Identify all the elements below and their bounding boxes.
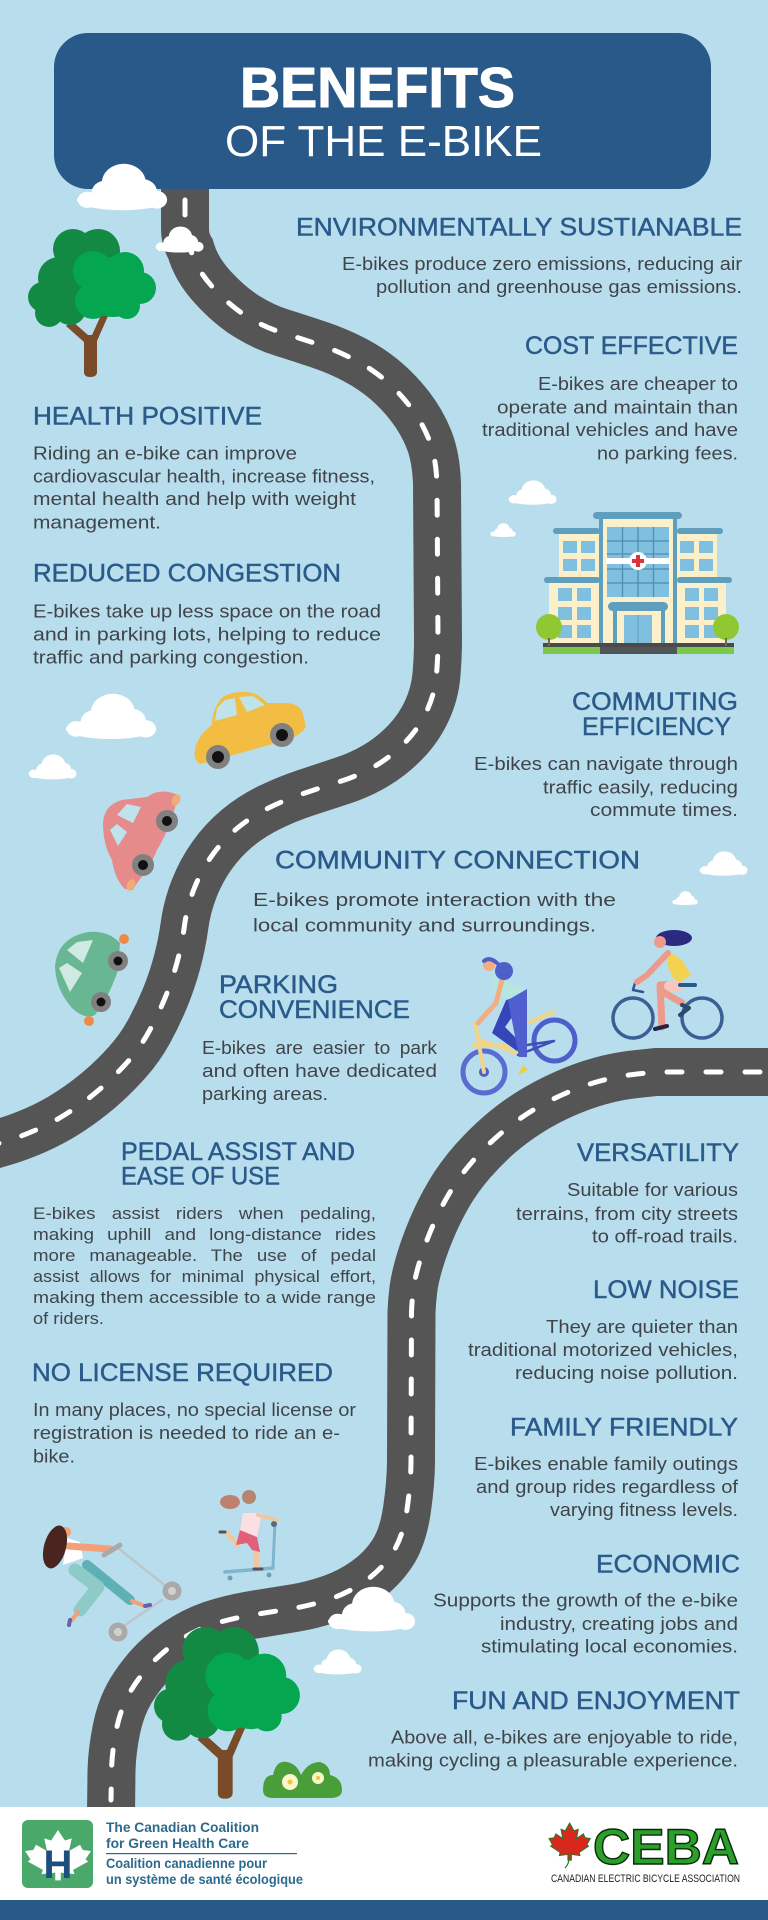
text block: parking convenience: and often have dedicated bbox=[202, 1061, 437, 1081]
logo text: Canadian Coalition for Green Health Care: Coalition canadienne pour bbox=[106, 1856, 268, 1871]
logo: CEBA: CEBA bbox=[593, 1819, 739, 1875]
text block: economic: Supports the growth of the e-bike bbox=[433, 1590, 738, 1610]
cloud: left of yellow car bbox=[66, 694, 156, 739]
icon: yellow car bbox=[195, 692, 306, 769]
text block: pedal assist: of riders. bbox=[33, 1309, 104, 1328]
text block: family friendly: and group rides regardless of bbox=[476, 1477, 739, 1497]
text block: reduced congestion: traffic and parking congestion. bbox=[33, 648, 309, 668]
text block: family friendly: E-bikes enable family outings bbox=[474, 1454, 738, 1474]
cloud: road top bbox=[155, 226, 204, 253]
text block: cost effective: E-bikes are cheaper to bbox=[538, 374, 738, 394]
text block: versatility bbox=[516, 1139, 739, 1246]
text block: environmentally sustainable: pollution and greenhouse gas emissions. bbox=[376, 277, 742, 297]
text block: cost effective bbox=[482, 332, 738, 464]
text block: pedal assist: more manageable. The use of pedal bbox=[33, 1246, 376, 1265]
icon: green car bbox=[55, 932, 129, 1026]
text block: no license required: registration is needed to ride an e- bbox=[33, 1423, 340, 1443]
text block: health positive: management. bbox=[33, 512, 161, 532]
cloud: small left bbox=[28, 754, 77, 779]
text block: pedal assist: PEDAL ASSIST AND bbox=[121, 1138, 355, 1166]
text block: no license required bbox=[32, 1359, 356, 1466]
text block: community connection: COMMUNITY CONNECTION bbox=[275, 846, 640, 874]
road: upper winding road bbox=[0, 180, 438, 1152]
text block: environmentally sustainable bbox=[296, 214, 742, 297]
text block: cost effective: no parking fees. bbox=[597, 444, 738, 464]
text block: family friendly: FAMILY FRIENDLY bbox=[510, 1414, 738, 1442]
footer bar bbox=[0, 1900, 768, 1920]
text block: commuting efficiency bbox=[474, 688, 738, 820]
tree: lower bbox=[154, 1627, 300, 1799]
logo text: Canadian Coalition for Green Health Care: for Green Health Care bbox=[106, 1836, 249, 1851]
text block: pedal assist: making them accessible to a wide range bbox=[33, 1288, 376, 1307]
text block: community connection: E-bikes promote interaction with the bbox=[253, 890, 616, 910]
text block: fun and enjoyment: FUN AND ENJOYMENT bbox=[452, 1687, 740, 1715]
text block: fun and enjoyment: making cycling a pleasurable experience. bbox=[368, 1750, 738, 1770]
text block: commuting efficiency: E-bikes can navigate through bbox=[474, 754, 738, 774]
tree: top left bbox=[28, 229, 156, 377]
text block: low noise: reducing noise pollution. bbox=[515, 1363, 738, 1383]
text block: environmentally sustainable: ENVIRONMENTALLY SUSTIANABLE bbox=[296, 214, 742, 242]
cloud: near lower road bbox=[328, 1587, 415, 1631]
text block: community connection: local community and surroundings. bbox=[253, 916, 596, 936]
text block: economic bbox=[433, 1550, 740, 1657]
icon: cyclist in yellow bbox=[613, 930, 722, 1038]
logo text: Canadian Coalition for Green Health Care: The Canadian Coalition bbox=[106, 1820, 259, 1835]
title: Benefits: BENEFITS bbox=[240, 56, 515, 120]
cloud: small lower bbox=[313, 1649, 362, 1674]
text block: health positive: mental health and help with weight bbox=[33, 489, 356, 509]
text block: reduced congestion: REDUCED CONGESTION bbox=[33, 560, 341, 588]
text block: pedal assist bbox=[33, 1138, 376, 1328]
text block: parking convenience: parking areas. bbox=[202, 1084, 328, 1104]
text block: pedal assist: making uphill and long-distance rides bbox=[33, 1225, 376, 1244]
cloud: right bbox=[699, 851, 748, 876]
text block: reduced congestion: and in parking lots, helping to reduce bbox=[33, 624, 381, 644]
text block: cost effective: traditional vehicles and have bbox=[482, 420, 738, 440]
text block: health positive: cardiovascular health, increase fitness, bbox=[33, 466, 375, 486]
text block: versatility: to off-road trails. bbox=[592, 1226, 738, 1246]
text block: no license required: bike. bbox=[33, 1446, 75, 1466]
text block: commuting efficiency: traffic easily, reducing bbox=[543, 778, 738, 798]
text block: no license required: In many places, no special license or bbox=[33, 1400, 356, 1420]
text block: pedal assist: assist allows for minimal physical effort, bbox=[33, 1267, 376, 1286]
text block: low noise: They are quieter than bbox=[546, 1317, 738, 1337]
text block: economic: ECONOMIC bbox=[596, 1550, 740, 1578]
icon: pink car bbox=[103, 791, 182, 892]
text block: pedal assist: EASE OF USE bbox=[121, 1162, 280, 1190]
text block: no license required: NO LICENSE REQUIRED bbox=[32, 1359, 333, 1387]
cloud: hospital small bbox=[490, 523, 516, 537]
text block: environmentally sustainable: E-bikes produce zero emissions, reducing air bbox=[342, 254, 742, 274]
text block: family friendly: varying fitness levels. bbox=[550, 1500, 738, 1520]
icon: cyclist in blue bbox=[463, 959, 575, 1093]
text block: low noise: LOW NOISE bbox=[593, 1276, 739, 1304]
logo text: Canadian Coalition for Green Health Care bbox=[106, 1820, 303, 1887]
text block: commuting efficiency: EFFICIENCY bbox=[582, 713, 731, 741]
text block: family friendly bbox=[474, 1414, 739, 1520]
text block: fun and enjoyment: Above all, e-bikes are enjoyable to ride, bbox=[391, 1728, 738, 1748]
text block: economic: industry, creating jobs and bbox=[500, 1614, 738, 1634]
text block: commuting efficiency: commute times. bbox=[590, 800, 738, 820]
text block: fun and enjoyment bbox=[368, 1687, 740, 1770]
text block: versatility: terrains, from city streets bbox=[516, 1204, 738, 1224]
icon: hospital bbox=[536, 512, 739, 654]
subtitle: of the e-bike: OF THE E-BIKE bbox=[225, 117, 542, 166]
text block: parking convenience: E-bikes are easier to park bbox=[202, 1038, 438, 1058]
icon: girl on scooter bbox=[220, 1490, 277, 1580]
text block: parking convenience: CONVENIENCE bbox=[219, 996, 410, 1024]
text block: pedal assist: E-bikes assist riders when pedaling, bbox=[33, 1204, 376, 1223]
cloud: title bbox=[77, 164, 167, 210]
text block: low noise: traditional motorized vehicles, bbox=[468, 1340, 738, 1360]
text block: cost effective: operate and maintain than bbox=[497, 398, 738, 418]
text block: community connection bbox=[253, 846, 640, 936]
title banner bbox=[54, 33, 711, 189]
text block: health positive bbox=[33, 402, 375, 532]
cloud: hospital large bbox=[508, 480, 557, 505]
text block: commuting efficiency: COMMUTING bbox=[572, 688, 738, 716]
logo: green health care badge bbox=[22, 1820, 93, 1888]
logo: CEBA bbox=[549, 1819, 740, 1885]
text block: health positive: Riding an e-bike can improve bbox=[33, 444, 297, 464]
text block: reduced congestion bbox=[33, 560, 381, 668]
text block: versatility: Suitable for various bbox=[567, 1180, 738, 1200]
text block: versatility: VERSATILITY bbox=[577, 1139, 739, 1167]
text block: economic: stimulating local economies. bbox=[481, 1637, 738, 1657]
cloud: right small bbox=[672, 891, 698, 905]
text block: reduced congestion: E-bikes take up less space on the road bbox=[33, 602, 381, 622]
text block: cost effective: COST EFFECTIVE bbox=[525, 332, 738, 360]
icon: woman on scooter bbox=[39, 1523, 181, 1642]
text block: low noise bbox=[468, 1276, 739, 1383]
logo text: Canadian Coalition for Green Health Care: un système de santé écologique bbox=[106, 1872, 303, 1887]
text block: health positive: HEALTH POSITIVE bbox=[33, 402, 262, 430]
road: lower winding road bbox=[111, 1072, 768, 1815]
text block: parking convenience bbox=[202, 971, 438, 1104]
logo: green health care badge: H bbox=[44, 1843, 72, 1887]
text block: parking convenience: PARKING bbox=[219, 971, 338, 999]
icon: flowering bush bbox=[263, 1762, 342, 1798]
footer band bbox=[0, 1807, 768, 1900]
